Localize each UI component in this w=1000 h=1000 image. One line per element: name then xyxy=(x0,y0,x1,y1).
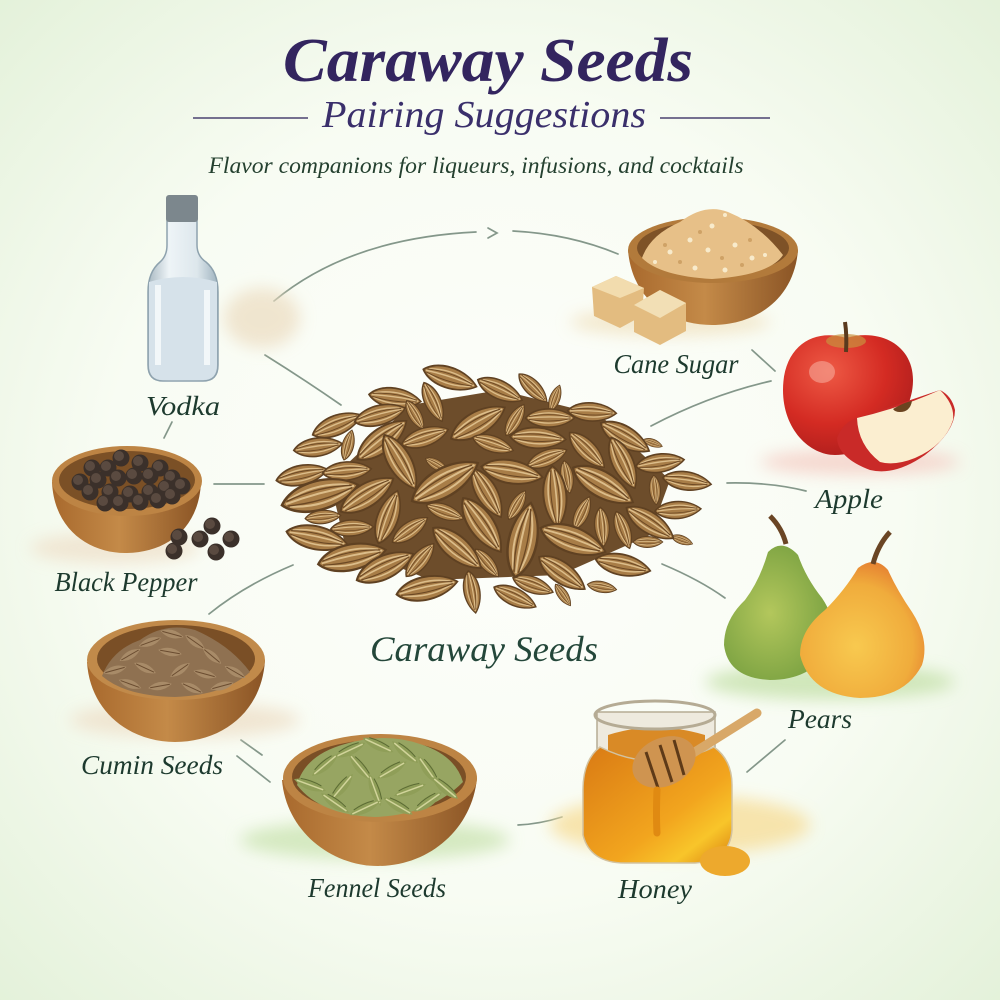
label: honey: Honey xyxy=(617,874,692,904)
label: fennel seeds: Fennel Seeds xyxy=(307,873,446,903)
label: caraway seeds: Caraway Seeds xyxy=(370,629,598,669)
icon: honey jar xyxy=(550,701,810,876)
icon: fennel seeds bowl xyxy=(240,733,510,866)
label: pears: Pears xyxy=(787,704,852,734)
label: apple: Apple xyxy=(813,484,883,514)
icon: caraway seed pile xyxy=(273,358,714,616)
subtitle: pairing suggestions: Pairing Suggestions xyxy=(321,94,646,136)
label: black pepper: Black Pepper xyxy=(54,567,198,597)
label: vodka: Vodka xyxy=(146,391,220,421)
tagline: Flavor companions for liqueurs, infusions, and cocktails xyxy=(207,153,743,179)
icon: black pepper bowl xyxy=(30,446,240,564)
label: cane sugar: Cane Sugar xyxy=(614,349,739,379)
icon: vodka bottle xyxy=(148,195,300,381)
icon: cumin seeds bowl xyxy=(70,620,300,742)
icon: cane sugar bowl xyxy=(570,209,798,345)
label: cumin seeds: Cumin Seeds xyxy=(81,750,223,780)
connector arcs xyxy=(164,228,806,825)
icon: apple xyxy=(760,322,960,475)
icon: pears xyxy=(705,516,955,700)
title: Caraway Seeds xyxy=(283,27,693,95)
